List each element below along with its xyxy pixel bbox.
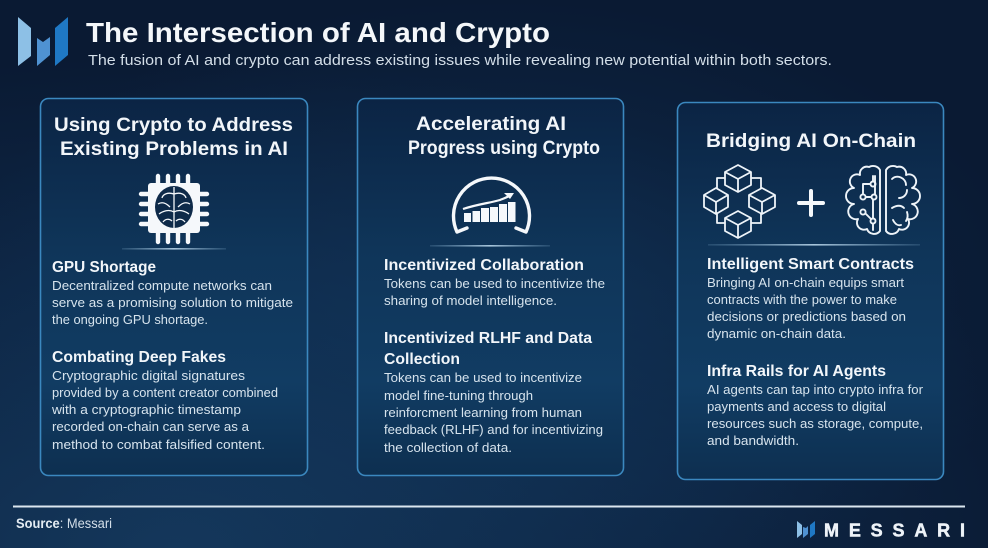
text block: infra rails for AI agents: Infra Rails for AI Agents [707, 363, 886, 380]
text block: infra rails for AI agents: resources such as storage, compute, [707, 416, 923, 431]
text block: intelligent smart contracts [707, 256, 914, 341]
subtitle: The fusion of AI and crypto can address existing issues while revealing new potential within both sectors. [88, 52, 832, 69]
title: The Intersection of AI and Crypto [86, 17, 550, 48]
icon: gauge with growth chart [454, 178, 530, 232]
divider [708, 244, 920, 246]
text block: GPU shortage: serve as a promising solution to mitigate [52, 295, 293, 310]
icon: connected blocks [704, 165, 775, 238]
text block: intelligent smart contracts: dynamic on-chain data. [707, 326, 846, 341]
heading: panel 2 [408, 113, 600, 159]
heading: panel 2: Accelerating AI [416, 113, 566, 135]
source note: Source: Messari [16, 516, 112, 531]
text block: incentivized RLHF: the collection of data. [384, 440, 512, 455]
text block: incentivized collaboration [384, 257, 605, 308]
heading: panel 1 [54, 114, 293, 160]
icon: circuit brain [846, 166, 920, 234]
heading: panel 2: Progress using Crypto [408, 137, 600, 159]
text block: infra rails for AI agents: AI agents can tap into crypto infra for [707, 382, 924, 397]
text block: intelligent smart contracts: contracts with the power to make [707, 292, 897, 307]
text block: intelligent smart contracts: decisions or predictions based on [707, 309, 906, 324]
text block: GPU shortage: the ongoing GPU shortage. [52, 312, 208, 327]
text block: incentivized RLHF [384, 330, 603, 455]
text block: combating deep fakes: provided by a content creator combined [52, 385, 278, 400]
heading: panel 1: Using Crypto to Address [54, 114, 293, 136]
divider [430, 245, 550, 247]
text block: incentivized RLHF: Collection [384, 351, 460, 368]
logo: Messari mark [18, 17, 68, 66]
footer rule [13, 506, 965, 508]
text block: incentivized collaboration: Incentivized Collaboration [384, 257, 584, 274]
icon: AI chip with brain [141, 176, 207, 242]
text block: incentivized RLHF: feedback (RLHF) and for incentivizing [384, 422, 603, 437]
text block: GPU shortage: GPU Shortage [52, 259, 156, 276]
text block: combating deep fakes: Cryptographic digital signatures [52, 368, 245, 383]
text block: incentivized collaboration: Tokens can be used to incentivize the [384, 276, 605, 291]
text block: incentivized RLHF: Incentivized RLHF and Data [384, 330, 592, 347]
logo: Messari wordmark: MESSARI [824, 520, 965, 540]
text block: infra rails for AI agents [707, 363, 924, 448]
text block: incentivized collaboration: sharing of model intelligence. [384, 293, 557, 308]
text block: infra rails for AI agents: payments and access to digital [707, 399, 886, 414]
text block: combating deep fakes: Combating Deep Fakes [52, 349, 226, 366]
text block: combating deep fakes: recorded on-chain can serve as a [52, 419, 250, 434]
text block: combating deep fakes [51, 349, 278, 452]
text block: incentivized RLHF: reinforcment learning from human [384, 405, 582, 420]
panel: accelerating AI progress [358, 98, 624, 476]
text block: intelligent smart contracts: Bringing AI on-chain equips smart [707, 275, 904, 290]
text block: combating deep fakes: method to combat falsified content. [52, 437, 265, 452]
icon: plus [799, 191, 823, 215]
panel: bridging AI on-chain [678, 102, 944, 480]
panel: using crypto to address problems in AI [40, 98, 308, 476]
divider [122, 248, 226, 250]
text block: infra rails for AI agents: and bandwidth. [707, 433, 799, 448]
text block: incentivized RLHF: model fine-tuning through [384, 388, 533, 403]
text block: GPU shortage [52, 259, 293, 327]
text block: intelligent smart contracts: Intelligent Smart Contracts [707, 256, 914, 273]
text block: incentivized RLHF: Tokens can be used to incentivize [384, 370, 582, 385]
text block: GPU shortage: Decentralized compute networks can [52, 278, 272, 293]
heading: panel 1: Existing Problems in AI [60, 138, 288, 160]
text block: combating deep fakes: with a cryptographic timestamp [51, 402, 241, 417]
heading: panel 3: Bridging AI On-Chain [706, 130, 916, 152]
